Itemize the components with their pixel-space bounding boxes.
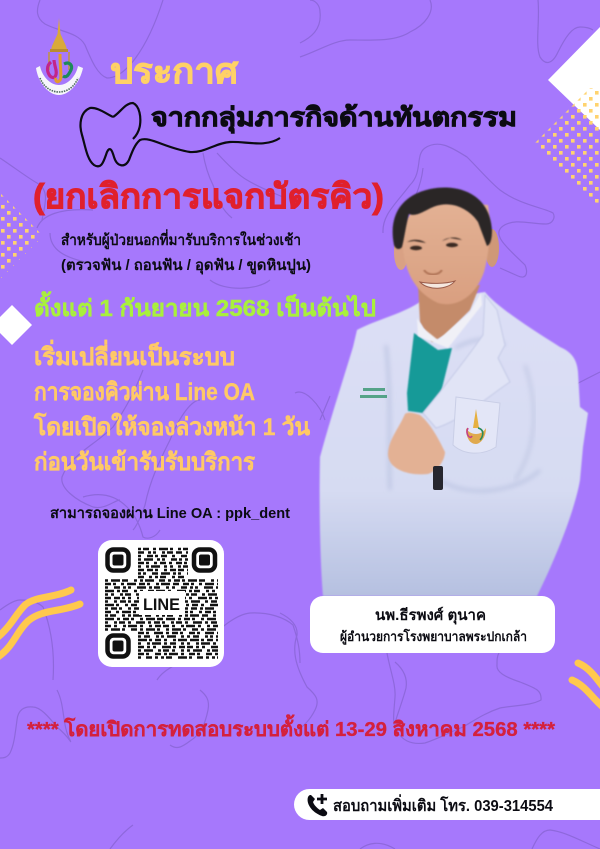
doctor title: ผู้อำนวยการโรงพยาบาลพระปกเกล้า: [340, 628, 527, 645]
contact text: สอบถามเพิ่มเติม โทร. 039-314554: [333, 794, 553, 815]
doctor name stitching: [360, 388, 387, 398]
decoration: dots top right: [535, 88, 600, 207]
text: start date: ตั้งแต่ 1 กันยายน 2568 เป็นต้นไป: [34, 291, 376, 321]
decoration: white diamond top right: [548, 27, 600, 130]
icon: phone: [308, 794, 327, 816]
doctor nose: [424, 270, 442, 274]
doctor collar: [417, 293, 482, 348]
QR finder top left: [108, 550, 128, 570]
name card: [310, 596, 555, 653]
photo: doctor in white coat: [320, 188, 588, 596]
QR finder bottom left: [108, 636, 128, 656]
text block: new booking system: โดยเปิดให้จองล่วงหน้า 1 วัน: [33, 412, 311, 441]
doctor hair: [393, 188, 492, 249]
doctor lapel: [423, 295, 510, 428]
text block: new booking system: [33, 339, 311, 476]
watch: [433, 466, 443, 490]
pocket logo: [466, 409, 486, 444]
contact pill: [294, 789, 600, 820]
doctor jacket: [320, 292, 588, 596]
heading: from dental mission group: จากกลุ่มภารกิจด้านทันตกรรม: [151, 102, 517, 134]
doctor eyes and brows: [407, 238, 462, 250]
pocket: [453, 397, 500, 453]
text block: new booking system: การจองคิวผ่าน Line OA: [34, 379, 255, 406]
doctor name: นพ.ธีรพงศ์ ตุนาค: [375, 606, 486, 625]
doctor mouth: [420, 281, 455, 288]
doctor sleeve fold: [515, 365, 534, 480]
QR code: [98, 540, 224, 667]
heading: cancel queue cards: (ยกเลิกการแจกบัตรคิว): [33, 178, 384, 216]
text block: new booking system: เริ่มเปลี่ยนเป็นระบบ: [34, 339, 235, 371]
doctor inner coat shading: [386, 339, 540, 491]
text block: new booking system: ก่อนวันเข้ารับรับบริการ: [34, 449, 255, 476]
doctor face: [402, 200, 490, 304]
decoration: dots left: [0, 193, 43, 279]
text: for morning outpatients: สำหรับผู้ป่วยนอกที่มารับบริการในช่วงเช้า: [61, 229, 301, 250]
doctor teal shirt: [407, 333, 452, 413]
text: line id: สามารถจองผ่าน Line OA : ppk_dent: [50, 505, 290, 522]
QR finder top right: [194, 550, 215, 570]
text: trial period notice: **** โดยเปิดการทดสอบระบบตั้งแต่ 13-29 สิงหาคม 2568 ****: [27, 714, 555, 741]
doctor neck: [418, 285, 480, 342]
QR centre label LINE: LINE: [143, 595, 180, 614]
decoration: yellow squiggles bottom left: [0, 590, 80, 657]
icon: tooth outline with squiggle underline: [81, 103, 280, 166]
heading: announcement: ประกาศ: [110, 52, 239, 91]
doctor ears: [394, 229, 499, 270]
text: service list: (ตรวจฟัน / ถอนฟัน / อุดฟัน / ขูดหินปูน): [61, 256, 311, 275]
decoration: yellow squiggles bottom right: [572, 663, 600, 708]
icon: hospital logo: [36, 18, 83, 95]
doctor hand: [388, 413, 445, 474]
decoration: white diamond left: [0, 305, 32, 345]
